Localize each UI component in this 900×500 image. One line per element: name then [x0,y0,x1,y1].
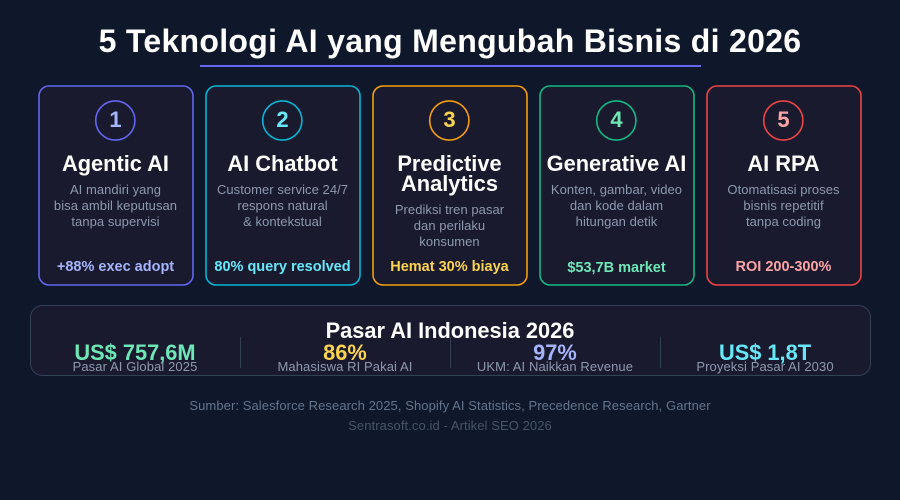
panel: card 3 Predictive Analytics: Hemat 30% biaya [390,259,509,275]
panel: card 2 AI Chatbot: respons natural [237,198,328,213]
panel: card 1 Agentic AI: AI mandiri yang [70,182,161,197]
panel: card 4 Generative AI: Generative AI [547,151,686,176]
panel: Pasar AI Indonesia 2026: 86% [323,340,367,365]
panel: card 1 Agentic AI [38,85,194,286]
panel: Pasar AI Indonesia 2026: US$ 1,8T [719,340,811,365]
panel: card 5 AI RPA [706,85,862,286]
panel: card 2 AI Chatbot: 80% query resolved [214,259,351,275]
panel: card 4 Generative AI: 4 [610,107,623,132]
panel: Pasar AI Indonesia 2026: 97% [533,340,577,365]
panel: card 5 AI RPA: bisnis repetitif [743,198,824,213]
panel: card 3 Predictive Analytics: Analytics [401,171,498,196]
title: 5 Teknologi AI yang Mengubah Bisnis di 2026 [99,23,801,59]
panel: card 2 AI Chatbot: Customer service 24/7 [217,182,348,197]
panel: Pasar AI Indonesia 2026: Mahasiswa RI Pakai AI [277,359,413,374]
panel: Pasar AI Indonesia 2026: Proyeksi Pasar AI 2030 [696,359,834,374]
panel: card 5 AI RPA: 5 [777,107,790,132]
panel: card 3 Predictive Analytics: Prediksi tren pasar [395,202,504,217]
panel: card 5 AI RPA: ROI 200-300% [736,259,831,275]
panel: Pasar AI Indonesia 2026: UKM: AI Naikkan Revenue [477,359,633,374]
panel: card 4 Generative AI: Konten, gambar, video [551,182,682,197]
panel: card 4 Generative AI: hitungan detik [576,214,657,229]
panel: card 3 Predictive Analytics [372,85,528,286]
title underline [200,65,701,67]
panel: card 5 AI RPA: Otomatisasi proses [727,182,840,197]
panel: card 4 Generative AI: $53,7B market [567,260,666,276]
panel: Pasar AI Indonesia 2026: US$ 757,6M [74,340,196,365]
panel: card 1 Agentic AI: bisa ambil keputusan [54,198,177,213]
panel: card 2 AI Chatbot [205,85,361,286]
panel: card 1 Agentic AI: Agentic AI [62,151,169,176]
panel: card 2 AI Chatbot: 2 [276,107,289,132]
panel: card 5 AI RPA: AI RPA [747,151,820,176]
panel: card 1 Agentic AI: tanpa supervisi [71,214,160,229]
panel: card 3 Predictive Analytics: 3 [443,107,456,132]
panel: card 4 Generative AI [539,85,695,286]
panel: card 1 Agentic AI: +88% exec adopt [57,259,174,275]
panel: card 2 AI Chatbot: & kontekstual [243,214,322,229]
panel: card 2 AI Chatbot: AI Chatbot [227,151,338,176]
panel: Pasar AI Indonesia 2026 [30,305,871,376]
panel: card 1 Agentic AI: 1 [109,107,122,132]
panel: Pasar AI Indonesia 2026: Pasar AI Global 2025 [73,359,197,374]
panel: card 4 Generative AI: dan kode dalam [570,198,663,213]
panel: card 3 Predictive Analytics: konsumen [419,234,480,249]
footer sources: Sumber: Salesforce Research 2025, Shopify AI Statistics, Precedence Research, Gartner [189,398,711,413]
panel: card 3 Predictive Analytics: dan perilaku [414,218,485,233]
panel: card 5 AI RPA: tanpa coding [746,214,821,229]
panel: Pasar AI Indonesia 2026: Pasar AI Indonesia 2026 [326,318,574,343]
footer credit: Sentrasoft.co.id - Artikel SEO 2026 [348,418,552,433]
panel: card 3 Predictive Analytics: Predictive [397,151,502,176]
